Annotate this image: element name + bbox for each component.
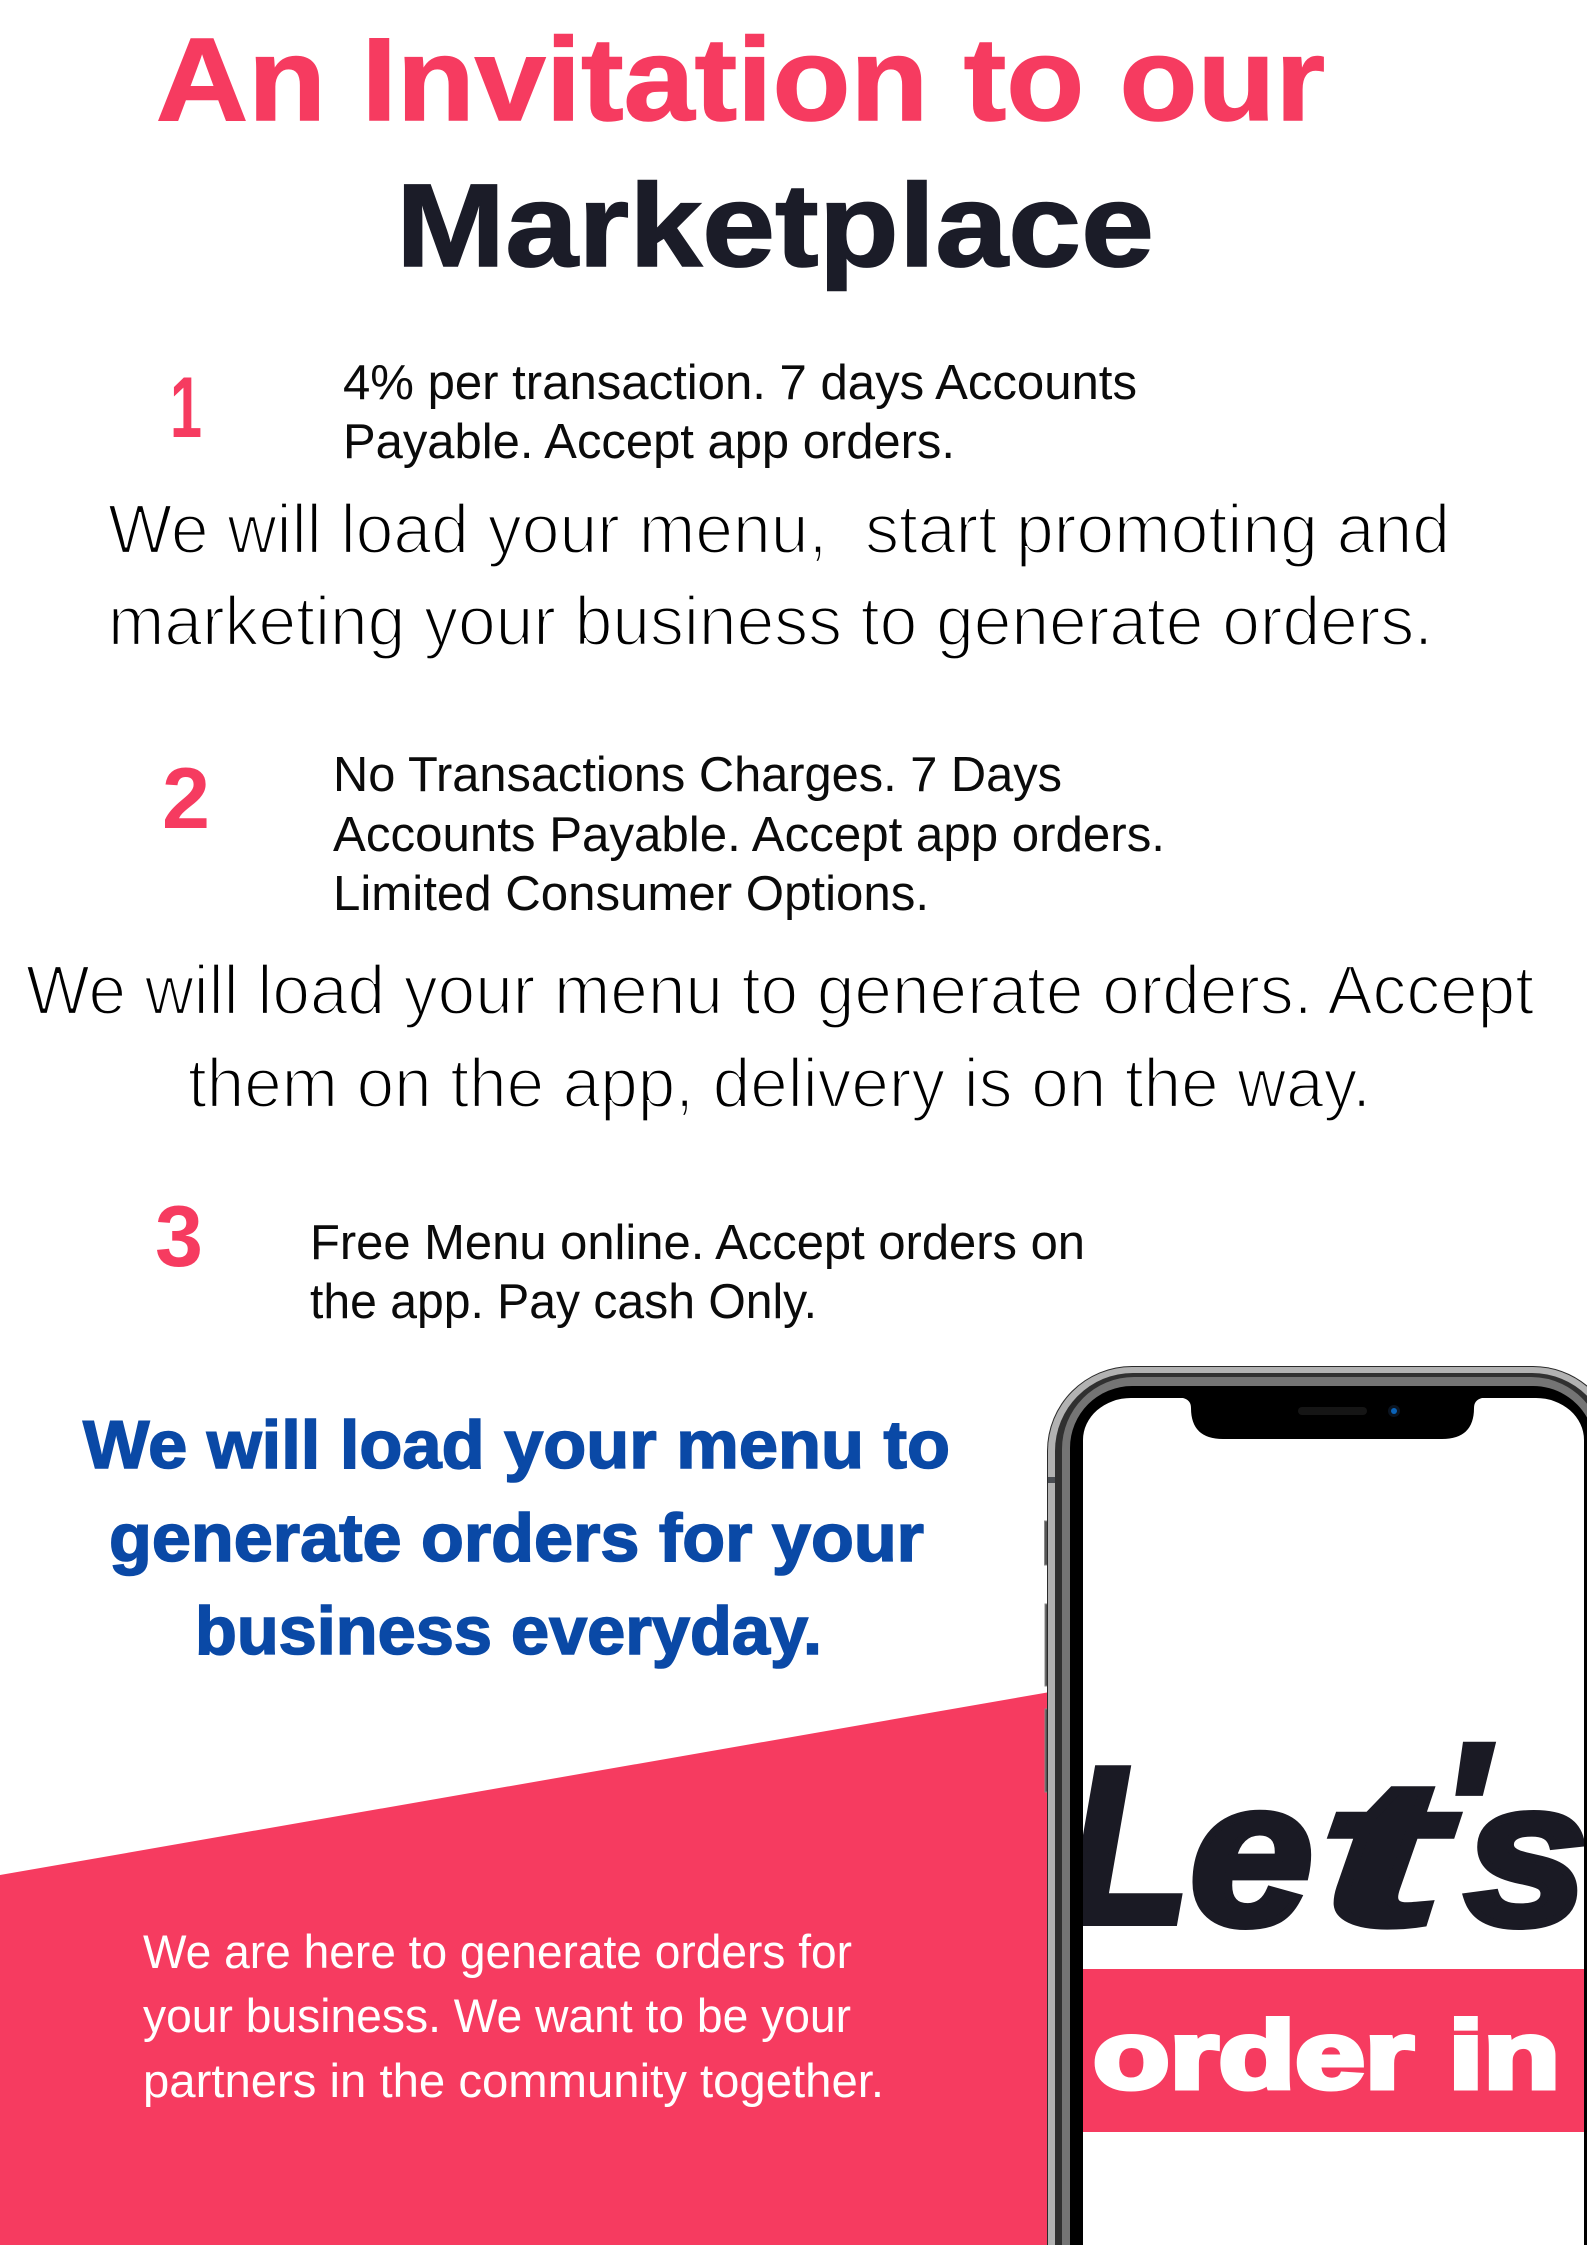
step 1 description: We will load your menu, start promoting and [108,490,1450,568]
title: Marketplace [396,160,1154,292]
logo word: Let's: e [1190,1739,1313,1968]
phone frame [1047,1366,1587,2245]
logo word: Let's: s [1465,1739,1587,1968]
partner message: partners in the community together. [143,2054,884,2107]
step 2 summary [333,748,1165,921]
step 3 summary: Free Menu online. Accept orders on [310,1216,1085,1270]
phone screen [1083,1398,1584,2245]
step 1 summary [343,356,1137,469]
partner message [143,1925,884,2107]
step 3 summary [310,1216,1085,1329]
step 2 description: them on the app, delivery is on the way. [188,1044,1371,1122]
logo word: Let's: ' [1442,1707,1492,1913]
step 1 description [108,490,1450,660]
title: An Invitation to our [156,14,1325,146]
logo band [1083,1969,1584,2132]
logo word: Let's: L [1068,1722,1190,1970]
partner message: We are here to generate orders for [143,1925,852,1978]
step 2 description [26,951,1534,1122]
partner message: your business. We want to be your [143,1989,851,2042]
step 3 blue callout: generate orders for your [109,1500,924,1576]
step 3 blue callout: We will load your menu to [83,1407,950,1483]
step 1 number: 1 [170,360,202,456]
logo word: Let's: t [1320,1739,1456,1968]
step 1 summary: 4% per transaction. 7 days Accounts [343,356,1137,410]
step 1 summary: Payable. Accept app orders. [343,415,955,469]
pink slanted panel [0,1692,1050,2245]
phone mockup [1044,1366,1587,2245]
step 2 summary: Limited Consumer Options. [333,867,929,921]
phone side buttons [1044,1521,1049,1792]
step 3 blue callout: business everyday. [195,1593,822,1669]
logo word: order in: order in [1093,2002,1560,2109]
logo word: Let's [1083,1742,1584,1930]
step 2 number: 2 [162,751,210,847]
step 2 description: We will load your menu to generate orders. Accept [26,951,1534,1029]
step 3 blue callout [83,1407,950,1669]
step 2 summary: Accounts Payable. Accept app orders. [333,808,1165,862]
step 3 number: 3 [155,1189,203,1285]
title [156,14,1325,292]
step 3 summary: the app. Pay cash Only. [310,1275,817,1329]
app logo [1083,1742,1584,2132]
step 2 summary: No Transactions Charges. 7 Days [333,748,1062,802]
step 1 description: marketing your business to generate orders. [108,582,1433,660]
phone notch [1183,1398,1482,1439]
